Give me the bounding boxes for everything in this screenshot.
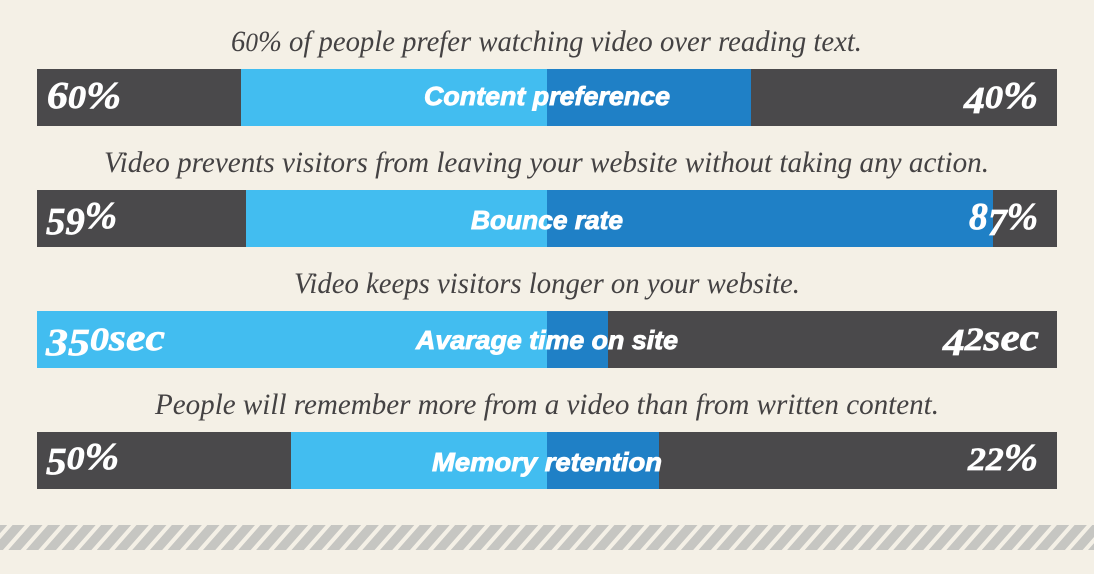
value: 42sec: sec (984, 317, 1032, 359)
value: 42sec: 4 (942, 322, 965, 364)
value: 60%: 60% (47, 75, 121, 117)
panel: memory retention (37, 389, 1057, 489)
value: 350sec: sec (109, 317, 157, 359)
value: 350sec: 0 (90, 322, 109, 358)
panel: average time on site (37, 268, 1057, 368)
caption: content preference: 60% of people prefer watching video over reading text. (231, 26, 862, 58)
striped footer band (0, 525, 1094, 550)
label: content preference: Content preference (424, 81, 670, 111)
label: time on site: Avarage time on site (415, 325, 678, 355)
value: 59%: 59 (46, 201, 85, 243)
bar: memory retention (37, 432, 1057, 489)
value: 87%: % (1007, 196, 1038, 238)
value: 87%: 7 (988, 202, 1009, 244)
value: 40%: 4 (963, 80, 985, 122)
value: 22%: 22% (967, 437, 1038, 479)
panel: bounce rate (37, 147, 1057, 247)
label: bounce rate: Bounce rate (471, 205, 623, 235)
value: 50%: 5 (46, 441, 67, 483)
bar: content preference (37, 69, 1057, 126)
value: 87%: 8 (969, 196, 988, 238)
caption: memory retention: People will remember more from a video than from written content. (154, 389, 939, 421)
label: memory retention: Memory retention (432, 447, 662, 477)
value: 50%: 0 (67, 441, 85, 477)
caption: time on site: Video keeps visitors longer on your website. (294, 268, 800, 300)
panel: content preference (37, 26, 1057, 126)
value: 50%: % (85, 436, 116, 478)
bar: time on site (37, 311, 1057, 368)
value: 40%: % (1003, 75, 1035, 117)
value: 350sec: 35 (45, 322, 90, 364)
value: 40%: 0 (985, 80, 1003, 116)
bar: bounce rate (37, 190, 1057, 247)
value: 59%: % (85, 195, 117, 237)
caption: bounce rate: Video prevents visitors from leaving your website without taking any action. (104, 147, 989, 179)
value: 42sec: 2 (964, 322, 984, 358)
